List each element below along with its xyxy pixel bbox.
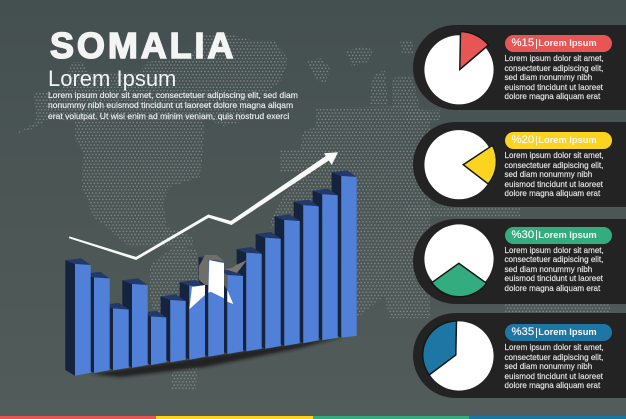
label pill: Lorem Ipsum — [538, 327, 597, 337]
description: consectetuer adipiscing elit, — [504, 64, 603, 73]
panel: 30% — [412, 219, 626, 304]
subtitle: Lorem Ipsum — [48, 66, 176, 91]
label pill — [504, 227, 612, 244]
intro text: erat volutpat. Ut wisi enim ad minim veniam, quis nostrud exerci — [48, 111, 289, 121]
description — [504, 343, 604, 390]
description: Lorem ipsum dolor sit amet, — [504, 246, 604, 254]
pie chart 15% — [424, 31, 494, 104]
description: dolore magna aliquam erat — [504, 189, 600, 198]
label pill: Lorem Ipsum — [538, 230, 597, 240]
description — [504, 246, 604, 293]
title: SOMALIA — [50, 25, 236, 66]
label pill: %20 — [512, 134, 534, 146]
label pill — [504, 324, 612, 341]
description: sed diam nonummy nibh — [504, 265, 592, 274]
description — [504, 151, 604, 198]
description — [504, 54, 604, 101]
description: sed diam nonummy nibh — [504, 73, 592, 82]
pie chart 20% — [424, 130, 497, 200]
description: sed diam nonummy nibh — [504, 362, 592, 371]
label pill — [504, 35, 612, 52]
description: consectetuer adipiscing elit, — [504, 161, 603, 170]
panel: 20% — [412, 122, 626, 207]
description: dolore magna aliquam erat — [504, 284, 600, 293]
description: dolore magna aliquam erat — [504, 381, 600, 390]
description: Lorem ipsum dolor sit amet, — [504, 54, 604, 63]
pie chart 30% — [424, 224, 494, 298]
label pill: %15 — [512, 37, 534, 49]
description: euismod tincidunt ut laoreet — [504, 180, 603, 189]
flag star on bars — [189, 255, 247, 309]
description: euismod tincidunt ut laoreet — [504, 83, 603, 92]
description: consectetuer adipiscing elit, — [504, 353, 603, 362]
label pill: %30 — [512, 229, 534, 241]
label pill: Lorem Ipsum — [538, 38, 597, 48]
panel: 35% — [412, 313, 626, 398]
intro text — [48, 90, 298, 121]
pie chart 35% — [422, 320, 494, 391]
label pill: Lorem Ipsum — [538, 135, 597, 145]
panel: 15% — [412, 25, 626, 110]
description: euismod tincidunt ut laoreet — [504, 372, 603, 381]
description: Lorem ipsum dolor sit amet, — [504, 151, 604, 160]
bottom colour strip — [0, 416, 626, 419]
intro text: nonummy nibh euismod tincidunt ut laoreet dolore magna aliqam — [48, 100, 293, 110]
description: euismod tincidunt ut laoreet — [504, 274, 603, 283]
description: Lorem ipsum dolor sit amet, — [504, 343, 604, 352]
description: consectetuer adipiscing elit, — [504, 255, 603, 264]
description: sed diam nonummy nibh — [504, 170, 592, 179]
intro text: Lorem ipsum dolor sit amet, consectetuer adipiscing elit, sed diam — [48, 90, 298, 100]
description: dolore magna aliquam erat — [504, 92, 600, 101]
label pill: %35 — [512, 326, 534, 338]
label pill — [504, 132, 612, 149]
